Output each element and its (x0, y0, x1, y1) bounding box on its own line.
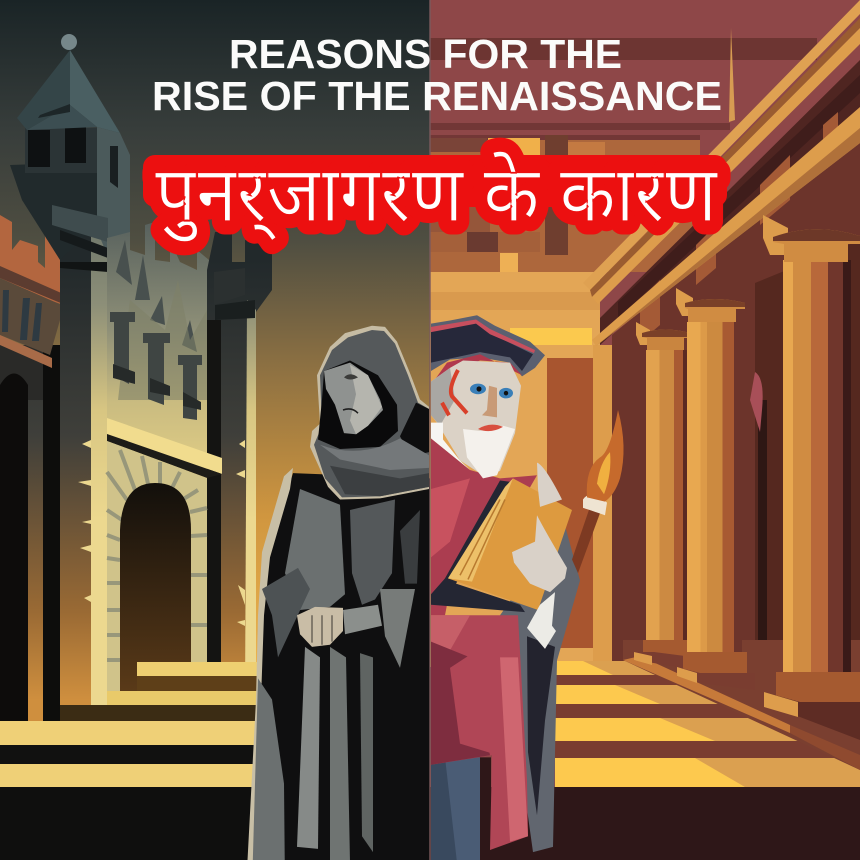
scarf folds (400, 403, 429, 455)
columns (634, 215, 860, 740)
robe (248, 473, 430, 860)
robe folds (252, 489, 420, 860)
face (324, 363, 383, 434)
hands (297, 605, 382, 647)
left building (0, 215, 68, 725)
coat inner shadow (527, 636, 555, 815)
apron (431, 615, 528, 850)
face (431, 361, 521, 478)
shadow wall (755, 240, 860, 760)
hood (310, 326, 429, 499)
entablature (583, 0, 860, 346)
gate with arch (107, 418, 222, 692)
floor stripes (430, 640, 860, 860)
heading red outline: पुनर्‌जागरण के कारण (155, 150, 718, 242)
turret and spire (17, 34, 120, 173)
colonnade wall (612, 130, 860, 780)
crenellated wall (107, 222, 215, 470)
title (152, 31, 722, 119)
robe highlights (246, 468, 293, 860)
panel: renaissance side (430, 0, 860, 860)
figure: hooded monk (246, 326, 430, 860)
sky background (0, 0, 430, 860)
legs (431, 757, 491, 860)
column 2 (676, 288, 755, 690)
hood shadow (318, 361, 398, 449)
center divider (429, 0, 431, 860)
castle (0, 34, 272, 725)
collar (431, 423, 470, 470)
wall ornament (750, 372, 763, 432)
red wall background (430, 0, 860, 860)
dark pole (758, 400, 767, 680)
torch (572, 410, 624, 573)
column 1 (634, 322, 690, 668)
hat (431, 315, 545, 386)
hand (512, 463, 567, 649)
title line 1: REASONS FOR THE (229, 31, 622, 77)
book (448, 478, 572, 610)
floor with steps (0, 662, 430, 860)
figure: renaissance scholar (431, 315, 624, 860)
upper bands (430, 28, 817, 272)
dark strap (431, 481, 525, 612)
title line 2: RISE OF THE RENAISSANCE (152, 73, 722, 119)
main tower (10, 127, 130, 725)
column 3 (763, 215, 860, 740)
interior glow (430, 272, 612, 667)
coat (500, 526, 580, 852)
heading text: पुनर्‌जागरण के कारण (155, 150, 718, 242)
panel: medieval side (0, 0, 430, 860)
red mantle (431, 438, 537, 615)
hindi heading (143, 150, 727, 242)
right tower (207, 232, 272, 700)
heading red backing (143, 155, 727, 207)
